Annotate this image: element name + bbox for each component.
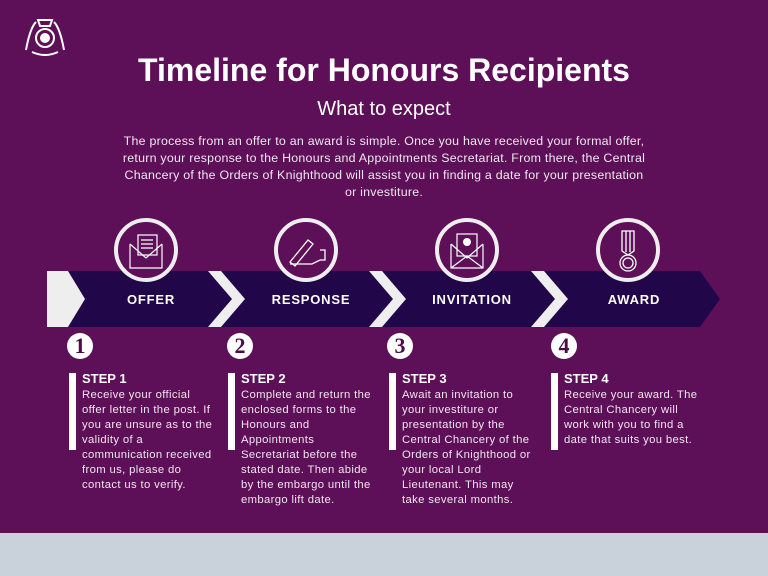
step 3: Lieutenant. This may [402, 479, 514, 491]
step 2: Honours and [241, 419, 310, 431]
subtitle: What to expect [317, 98, 451, 120]
step 3: your local Lord [402, 464, 481, 476]
step 3: presentation by the [402, 419, 505, 431]
step 4: Receive your award. The [564, 389, 697, 401]
step 2: by the embargo until the [241, 479, 371, 491]
number 4: 4 [558, 333, 570, 358]
number 2 [227, 333, 253, 359]
step 3: Orders of Knighthood or [402, 449, 531, 461]
timeline band with chevrons [47, 218, 720, 327]
title: Timeline for Honours Recipients [138, 52, 630, 88]
band labels: AWARD [608, 292, 660, 307]
step 4: work with you to find a [564, 419, 684, 431]
step 2: embargo lift date. [241, 494, 335, 506]
step 1 [69, 371, 212, 491]
icon: invitation envelope with crest [437, 220, 497, 280]
step 1: validity of a [82, 434, 143, 446]
number 4 [551, 333, 577, 359]
step 2: STEP 2 [241, 371, 286, 386]
icon: medal [598, 220, 658, 280]
step 1: you are unsure as to the [82, 419, 212, 431]
step 2: Complete and return the [241, 389, 371, 401]
step 2: stated date. Then abide [241, 464, 368, 476]
icon: hand with pen [276, 220, 336, 280]
logo: royal coat of arms [25, 19, 65, 56]
number 3: 3 [394, 333, 406, 358]
step 2: Appointments [241, 434, 314, 446]
band [47, 271, 720, 327]
band labels [127, 292, 660, 307]
number 2: 2 [234, 333, 246, 358]
number 1 [67, 333, 93, 359]
step 1: Receive your official [82, 389, 190, 401]
step 3: STEP 3 [402, 371, 447, 386]
step 3: your investiture or [402, 404, 498, 416]
band labels: RESPONSE [272, 292, 350, 307]
step 3 [389, 371, 531, 506]
step 4: date that suits you best. [564, 434, 692, 446]
icon: envelope letter [116, 220, 176, 280]
number 3 [387, 333, 413, 359]
step 4: STEP 4 [564, 371, 609, 386]
step 1: communication received [82, 449, 212, 461]
band labels: OFFER [127, 292, 175, 307]
step 1: offer letter in the post. If [82, 404, 210, 416]
step 2: enclosed forms to the [241, 404, 356, 416]
step 2 [228, 371, 371, 506]
step 2: Secretariat before the [241, 449, 357, 461]
intro text: The process from an offer to an award is simple. Once you have received your formal offer, return your response to the Honours and Appointments Secretariat. From there, the Central Chancery of the Orders of Knighthood will assist you in finding a date for your presentation or investiture. [123, 134, 645, 199]
band labels: INVITATION [432, 292, 512, 307]
step 1: STEP 1 [82, 371, 127, 386]
step 3: Await an invitation to [402, 389, 513, 401]
step 3: Central Chancery of the [402, 434, 529, 446]
step 1: from us, please do [82, 464, 181, 476]
step 1: contact us to verify. [82, 479, 186, 491]
number 1: 1 [74, 333, 86, 358]
step 3: take several months. [402, 494, 513, 506]
step 4: Central Chancery will [564, 404, 678, 416]
step 4 [551, 371, 697, 450]
